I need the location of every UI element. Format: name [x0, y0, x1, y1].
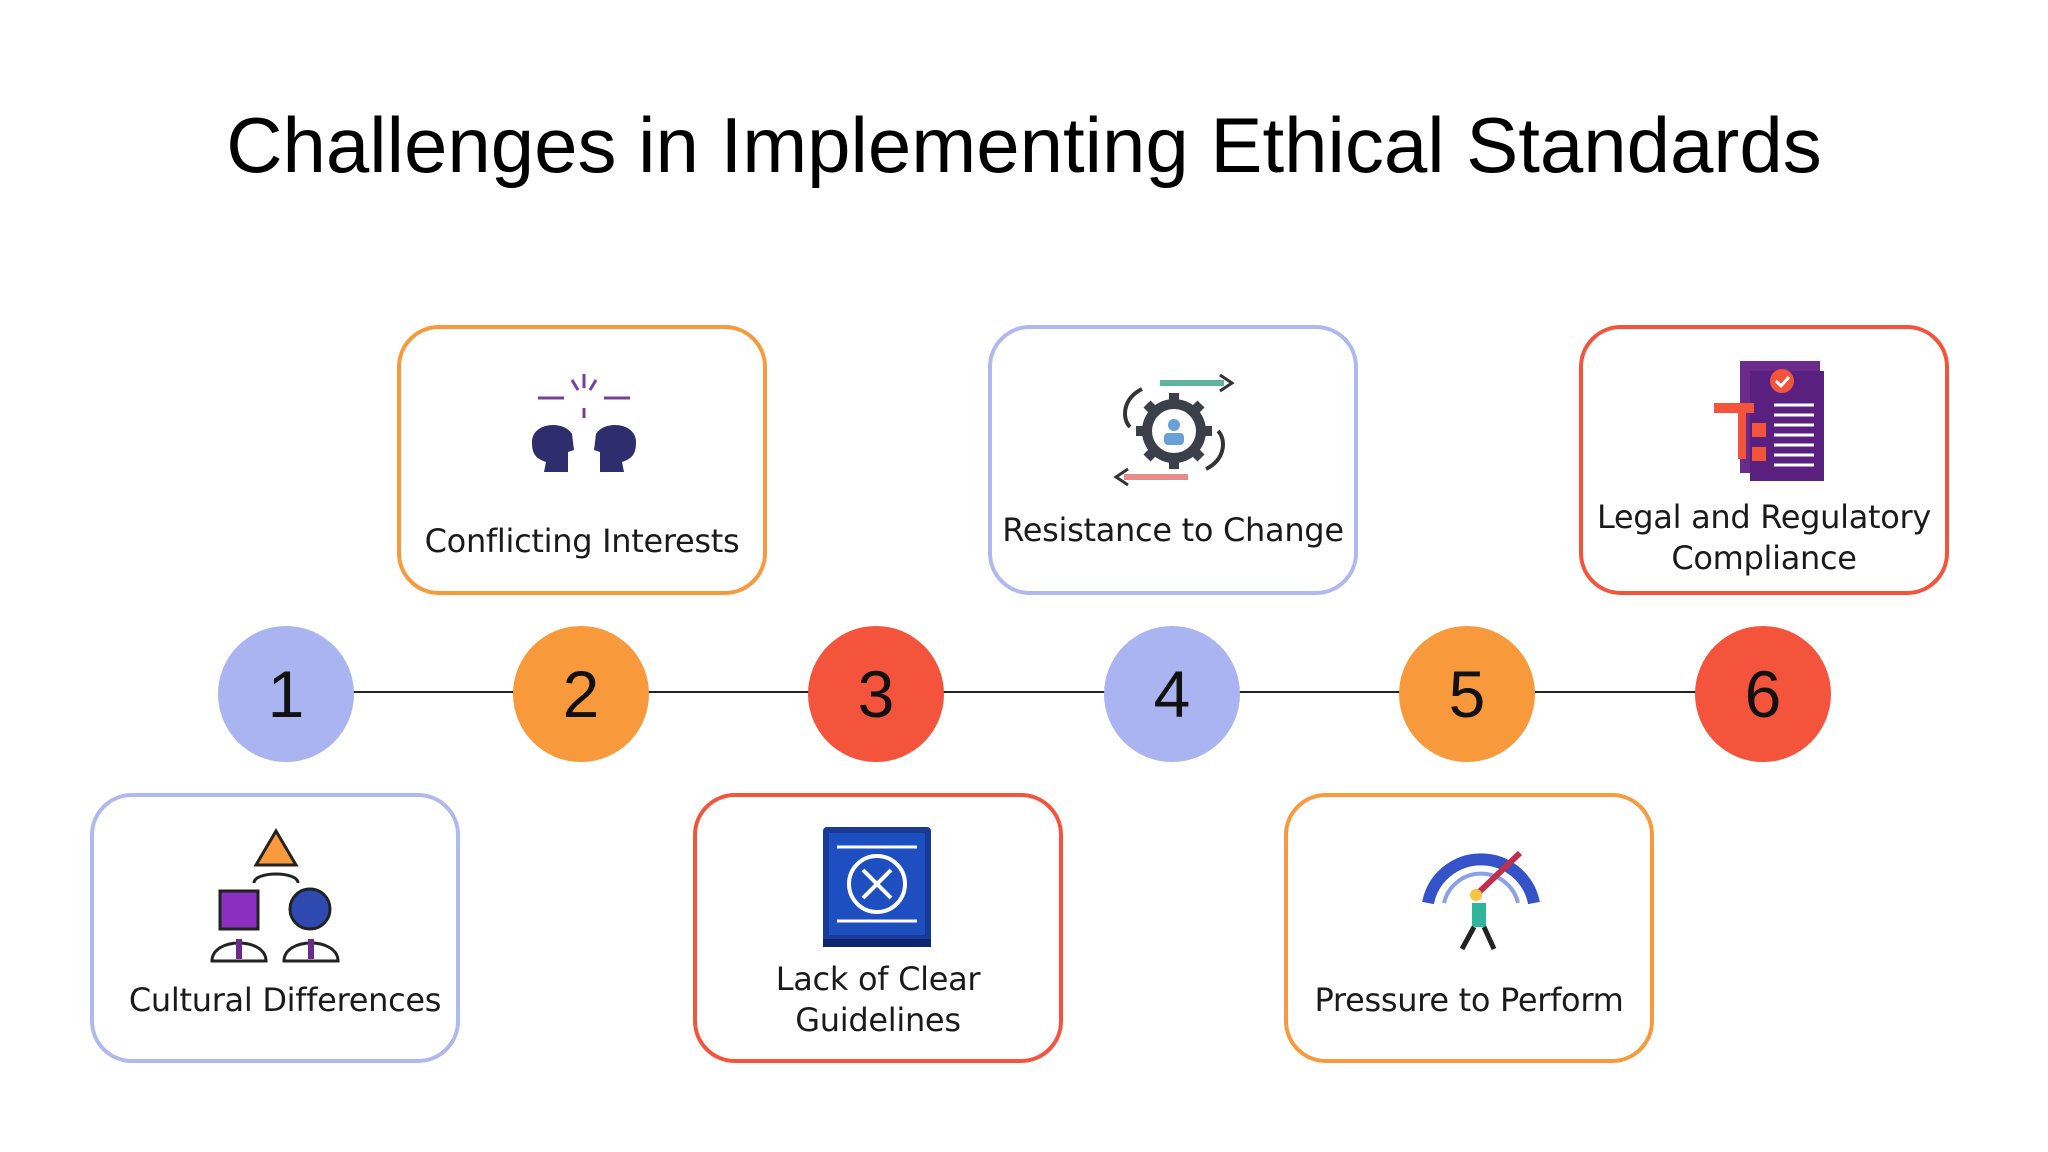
icon: document checklist [1714, 361, 1824, 481]
icon: people [210, 828, 340, 962]
panel: legal and regulatory compliance [1579, 325, 1949, 595]
text: Guidelines [795, 1001, 961, 1039]
circle 3 [808, 626, 944, 762]
text [776, 960, 981, 1039]
circle 6: 6 [1745, 657, 1781, 731]
circle 5: 5 [1449, 657, 1485, 731]
icon: heads [532, 374, 636, 472]
text: Legal and Regulatory [1597, 498, 1931, 536]
icon: book with x [823, 827, 931, 947]
circle 2: 2 [563, 657, 599, 731]
timeline line [286, 691, 1763, 693]
circle 6 [1695, 626, 1831, 762]
icon: gear cycle [1113, 374, 1235, 486]
panel: cultural differences [90, 793, 460, 1063]
panel: pressure to perform [1284, 793, 1654, 1063]
text: Pressure to Perform [1314, 981, 1624, 1019]
panel: resistance to change [988, 325, 1358, 595]
text: Conflicting Interests [425, 522, 739, 560]
text: Resistance to Change [1002, 511, 1344, 549]
panel: conflicting interests [397, 325, 767, 595]
circle 2 [513, 626, 649, 762]
icon: gauge and person [1422, 850, 1540, 950]
circle 4: 4 [1154, 657, 1190, 731]
circle 4 [1104, 626, 1240, 762]
circle 1 [218, 626, 354, 762]
text: Cultural Differences [129, 981, 441, 1019]
text: Lack of Clear [776, 960, 980, 998]
title: Challenges in Implementing Ethical Standards [226, 101, 1822, 189]
circle 3: 3 [858, 657, 894, 731]
text [1597, 498, 1931, 577]
circle 1: 1 [268, 657, 304, 731]
text: Compliance [1671, 539, 1857, 577]
circle 5 [1399, 626, 1535, 762]
panel: lack of clear guidelines [693, 793, 1063, 1063]
